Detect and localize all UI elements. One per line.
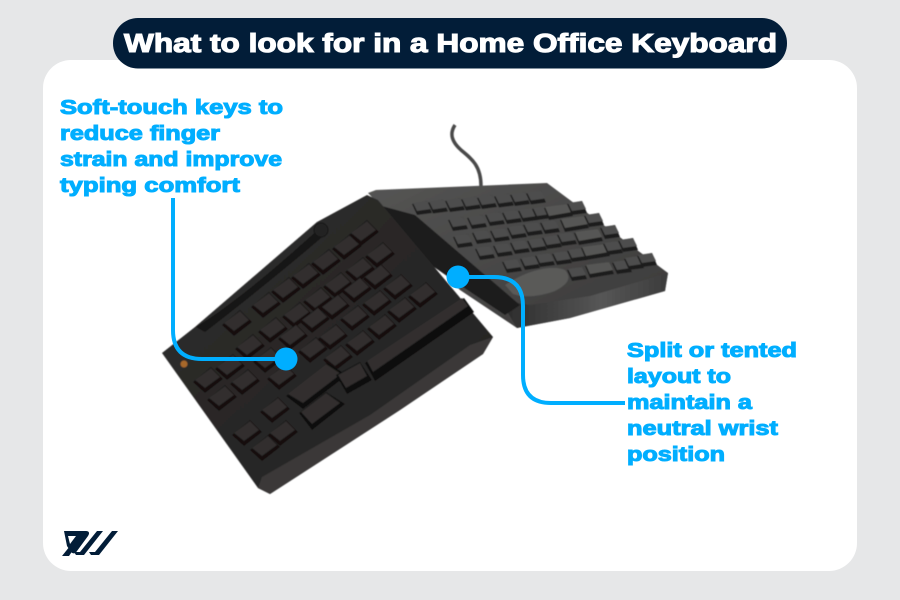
title <box>113 18 787 68</box>
title: What to look for in a Home Office Keyboard <box>124 30 777 58</box>
text: soft-touch keys: typing comfort <box>60 175 240 197</box>
logo dot <box>180 360 188 368</box>
text: soft-touch keys: strain and improve <box>60 149 282 171</box>
text: split layout: neutral wrist <box>627 418 778 440</box>
text: soft-touch keys <box>60 97 283 197</box>
panel: white card <box>43 60 857 571</box>
leader line: split layout <box>446 266 625 403</box>
callout: soft-touch keys <box>60 97 298 370</box>
left keyboard half <box>162 195 493 494</box>
leader line: soft-touch keys <box>173 198 298 370</box>
text: split layout: maintain a <box>627 392 753 414</box>
text: split layout: layout to <box>627 366 731 388</box>
keyboard photo: split ergonomic keyboard <box>162 125 668 494</box>
space bar <box>365 298 474 381</box>
text: soft-touch keys: Soft-touch keys to <box>60 97 283 119</box>
text: split layout: Split or tented <box>627 340 797 362</box>
text: soft-touch keys: reduce finger <box>60 123 220 145</box>
callout: split or tented layout <box>446 266 797 466</box>
icon: brand logo <box>62 531 118 556</box>
text: split layout: position <box>627 444 725 466</box>
text: split layout <box>627 340 797 466</box>
right keyboard half <box>368 183 668 328</box>
keyboard cable <box>452 125 481 186</box>
shift and ctrl keys <box>286 363 347 409</box>
